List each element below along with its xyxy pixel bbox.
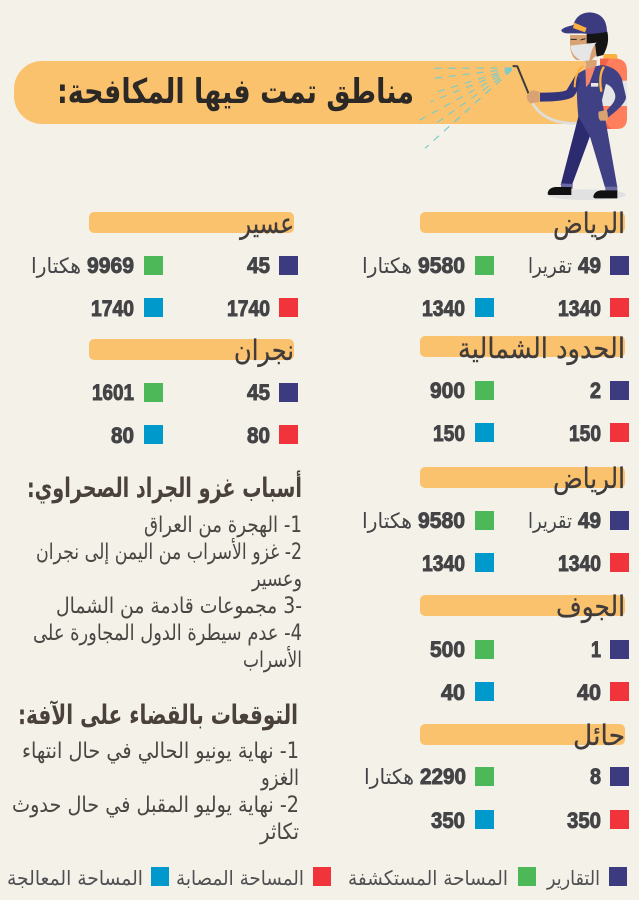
text block: expectations for eliminating the pest: التوقعات بالقضاء على الآفة: <box>18 700 298 731</box>
section: نجران: 80 <box>247 423 270 448</box>
section: عسير: هكتارا <box>31 254 81 278</box>
section: عسير: 9969 <box>87 253 134 278</box>
section: الحدود الشمالية: 2 <box>590 378 601 403</box>
legend <box>7 866 627 890</box>
section: نجران: نجران <box>234 334 294 367</box>
illustration: pest control worker spraying <box>414 12 627 200</box>
section: الجوف <box>420 590 629 705</box>
section: حائل: 350 <box>567 808 601 833</box>
text block: causes of the locust invasion: 1- الهجرة من العراق <box>144 513 302 538</box>
section: الرياض 2: 1340 <box>558 551 601 576</box>
section: عسير: 1740 <box>227 296 270 321</box>
section: الرياض 2: تقريرا <box>528 509 572 533</box>
section: عسير <box>31 207 298 321</box>
section: الرياض: 9580 <box>418 253 465 278</box>
text block: expectations for eliminating the pest: الغزو <box>260 766 299 791</box>
section: الرياض: 1340 <box>422 296 465 321</box>
text block: causes of the locust invasion: الأسراب <box>243 646 302 673</box>
legend: المساحة المستكشفة <box>348 866 508 890</box>
text block: expectations for eliminating the pest: تكاثر <box>259 820 299 845</box>
section: حائل: حائل <box>573 719 625 752</box>
text block: causes of the locust invasion <box>27 470 302 673</box>
text block: causes of the locust invasion: وعسير <box>251 567 302 592</box>
section: حائل: 2290 <box>420 764 466 789</box>
section: الجوف: الجوف <box>556 590 625 623</box>
text block: expectations for eliminating the pest: 2- نهاية يوليو المقبل في حال حدوث <box>12 793 299 818</box>
section: الرياض: 1340 <box>558 296 601 321</box>
section: الجوف: 40 <box>441 680 465 705</box>
section: حائل: 350 <box>431 808 465 833</box>
text block: causes of the locust invasion: أسباب غزو الجراد الصحراوي: <box>27 470 302 504</box>
section: الرياض: الرياض <box>553 207 625 240</box>
section: نجران: 45 <box>247 380 270 405</box>
section: الرياض: 49 <box>578 253 601 278</box>
section: الرياض 2: 1340 <box>422 551 465 576</box>
title: مناطق تمت فيها المكافحة: <box>57 72 414 112</box>
section: الرياض: تقريرا <box>528 254 572 278</box>
section: حائل: 8 <box>590 764 601 789</box>
legend: المساحة المصابة <box>176 866 304 890</box>
section: الرياض 2: الرياض <box>553 462 625 495</box>
text block: causes of the locust invasion: -3 مجموعات قادمة من الشمال <box>56 594 302 619</box>
text block: expectations for eliminating the pest: 1- نهاية يونيو الحالي في حال انتهاء <box>22 739 299 764</box>
text block: causes of the locust invasion: 4- عدم سيطرة الدول المجاورة على <box>33 621 302 646</box>
section: الرياض: هكتارا <box>362 254 412 278</box>
section: الحدود الشمالية: 900 <box>430 378 465 403</box>
section: الرياض <box>362 207 629 321</box>
section: الحدود الشمالية: 150 <box>569 421 601 446</box>
section: عسير: 45 <box>247 253 270 278</box>
section: حائل: هكتارا <box>364 765 414 789</box>
section: الحدود الشمالية: 150 <box>433 421 465 446</box>
text block: causes of the locust invasion: 2- غزو الأسراب من اليمن إلى نجران <box>36 538 302 565</box>
section: الحدود الشمالية: الحدود الشمالية <box>458 332 625 365</box>
text block: expectations for eliminating the pest <box>12 700 299 845</box>
section: الجوف: 500 <box>430 637 465 662</box>
section: الرياض 2 <box>362 462 629 576</box>
section: الحدود الشمالية <box>420 332 629 446</box>
legend: المساحة المعالجة <box>7 866 143 890</box>
section: عسير: 1740 <box>91 296 134 321</box>
section: نجران: 1601 <box>92 380 134 405</box>
section: نجران <box>89 334 298 448</box>
section: الرياض 2: 9580 <box>418 508 465 533</box>
section: الرياض 2: هكتارا <box>362 509 412 533</box>
section: الجوف: 1 <box>591 637 601 662</box>
legend: التقارير <box>546 866 600 890</box>
title banner <box>14 61 585 124</box>
section: عسير: عسير <box>238 207 294 240</box>
section: نجران: 80 <box>111 423 134 448</box>
section: حائل <box>364 719 629 833</box>
section: الجوف: 40 <box>577 680 601 705</box>
section: الرياض 2: 49 <box>578 508 601 533</box>
